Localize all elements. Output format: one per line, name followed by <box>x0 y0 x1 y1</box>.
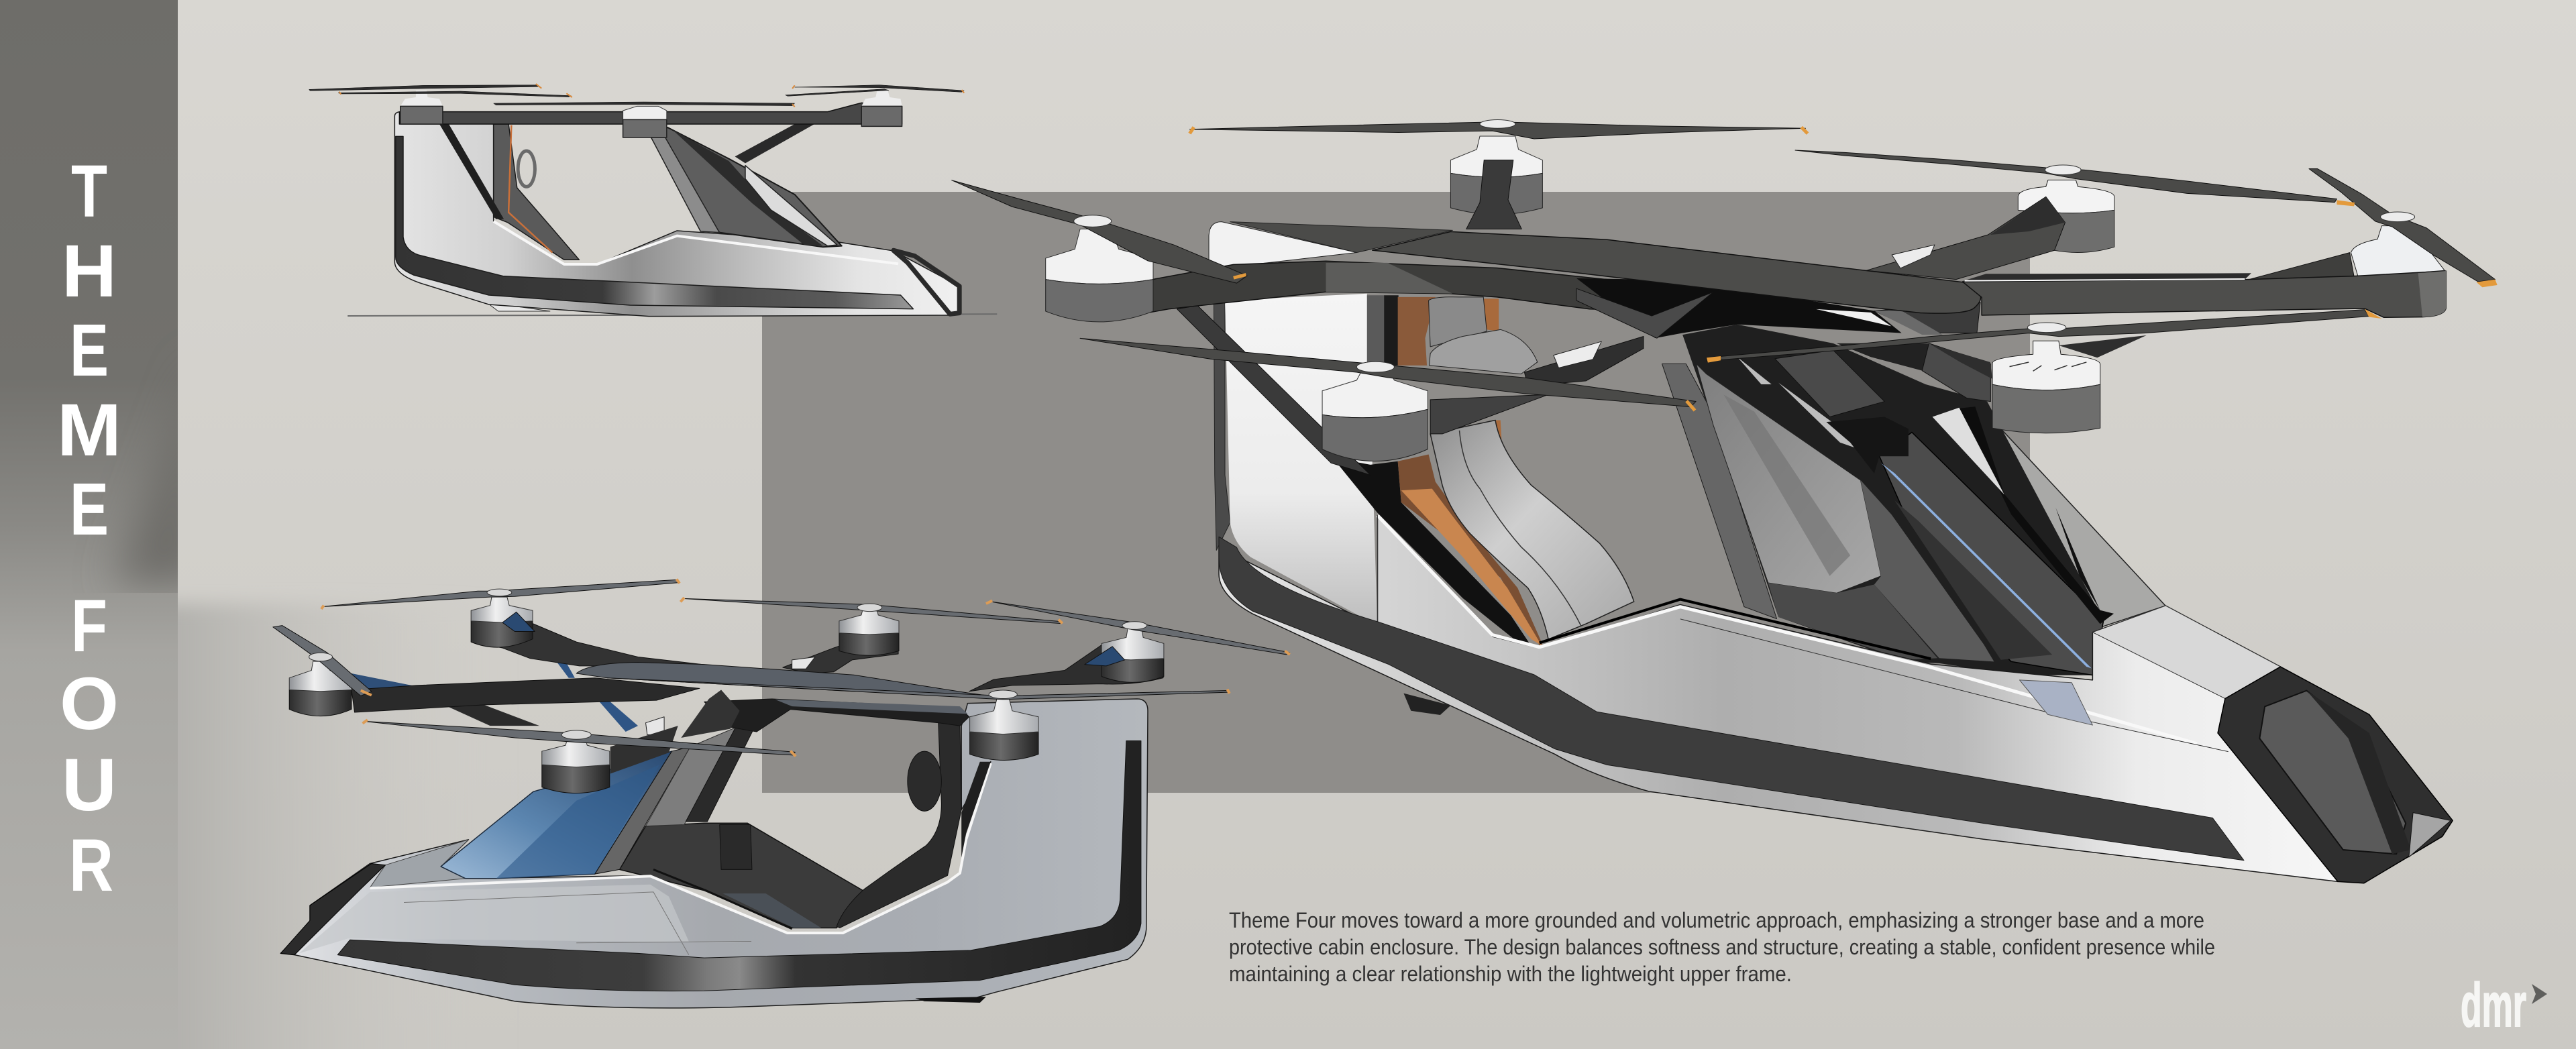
motor front left cap <box>542 739 610 767</box>
seat cushion <box>722 893 821 928</box>
white cabin sill <box>1378 516 2197 744</box>
vertical title: THEME FOUR: U <box>62 744 117 826</box>
windshield pillar <box>651 137 719 233</box>
white shoulder highlight <box>494 221 898 264</box>
frame, strut and left arm <box>1150 222 1644 475</box>
clear screen <box>745 166 837 246</box>
window pillar <box>595 747 690 874</box>
lower glass <box>1768 583 1937 660</box>
windshield dark reflection <box>496 765 659 879</box>
motor top centre <box>1450 136 1542 229</box>
motor rear left cap <box>471 597 533 622</box>
left edge strip <box>1214 266 1230 550</box>
arm strut <box>2249 253 2354 280</box>
middle glass <box>1860 480 1994 661</box>
headrest <box>518 151 535 186</box>
right arm <box>969 645 1163 692</box>
mast <box>1466 160 1521 229</box>
seat lower <box>1430 421 1634 639</box>
dark side band <box>396 136 913 309</box>
front frame <box>681 690 740 738</box>
hubs <box>2045 165 2081 175</box>
left arm <box>1150 261 1644 313</box>
trim right <box>1483 298 1502 451</box>
seat back <box>1429 297 1487 347</box>
orange blade tips <box>1189 127 1808 410</box>
top window frame <box>704 699 969 732</box>
side view vehicle (top left) <box>309 84 997 317</box>
front pillar <box>1662 364 1776 619</box>
orange trim lower <box>1401 489 1542 645</box>
vertical title: THEME FOUR: T <box>71 150 107 233</box>
cap <box>1450 136 1542 177</box>
description paragraph: maintaining a clear relationship with the lightweight upper frame. <box>1229 962 1792 986</box>
roof top <box>1373 231 1981 313</box>
motor rear right cap <box>2018 180 2114 213</box>
strut to front motor <box>1931 335 2147 379</box>
side window <box>1697 364 1881 593</box>
jamb black <box>1384 295 1399 366</box>
left arm <box>352 678 700 712</box>
vertical title: THEME FOUR: R <box>69 824 113 907</box>
motor left cap <box>289 661 352 692</box>
lower left background fade <box>80 604 510 1049</box>
motor left body <box>1046 280 1153 322</box>
bracket <box>646 717 664 735</box>
front motor body <box>1992 384 2100 433</box>
arm end light <box>2418 271 2446 317</box>
rear strut <box>439 124 504 219</box>
dark glass strip <box>672 129 823 246</box>
white glints <box>1737 357 1880 456</box>
motor front left cap <box>1322 372 1428 418</box>
logo chevron <box>2532 984 2547 1004</box>
grey backdrop panel <box>762 192 2030 793</box>
ground line <box>347 314 997 316</box>
arm to front motor <box>1430 394 1548 434</box>
motor rear right body <box>2050 210 2114 253</box>
white triangle <box>1933 408 2004 494</box>
upper white panel <box>1209 222 1356 266</box>
motor rear left body <box>471 621 533 647</box>
brown trim upper <box>1398 297 1436 366</box>
strut to motor <box>1922 343 1990 402</box>
motor rear centre body <box>839 633 899 655</box>
blue windshield <box>441 751 672 879</box>
rear motors and arm <box>1866 180 2445 280</box>
cylinder <box>1450 173 1542 215</box>
roof slab <box>1373 231 1981 313</box>
arm below roof end <box>1837 343 1929 371</box>
nose edge <box>280 863 385 955</box>
screen spike <box>2055 508 2100 610</box>
back arm <box>472 620 715 666</box>
X brace <box>1576 288 1713 338</box>
description paragraph <box>1229 908 2215 986</box>
body shell <box>1219 516 2338 881</box>
interior cabin <box>619 823 863 928</box>
skid <box>915 997 986 1003</box>
vertical title: THEME FOUR: F <box>71 585 107 667</box>
motor centre <box>623 106 667 119</box>
motor front right cap <box>970 699 1038 734</box>
rear arm <box>1866 197 2065 280</box>
upper arm <box>399 103 902 124</box>
white sill line <box>370 763 991 933</box>
back wall and seat <box>1209 222 1634 646</box>
roof slab <box>576 662 989 696</box>
vertical title: THEME FOUR: H <box>62 230 117 313</box>
cap grille <box>2010 362 2086 371</box>
left arm blue fin <box>352 673 416 690</box>
black footwell <box>1333 458 1532 646</box>
vertical title: THEME FOUR <box>57 150 121 907</box>
motor left body <box>289 690 352 716</box>
right blue fin <box>1085 647 1125 666</box>
vertical title: THEME FOUR: O <box>60 663 119 745</box>
right clear screen <box>1980 406 2165 630</box>
hubs <box>309 589 1147 739</box>
motor left <box>400 91 443 106</box>
dark pillar <box>686 711 763 822</box>
vertical title: THEME FOUR: E <box>70 309 109 392</box>
nose screen <box>2259 691 2406 854</box>
blade front right <box>1707 310 2369 361</box>
lower left vehicle (three-quarter front) <box>273 579 1290 1008</box>
rear centre arm <box>783 637 898 673</box>
body highlight plate <box>299 885 751 953</box>
white glint under roof <box>1816 309 1891 326</box>
foot skid <box>1403 694 1450 715</box>
white highlight <box>1965 279 2245 281</box>
blue struts behind <box>556 661 638 732</box>
body shell <box>280 699 1148 1008</box>
blue streak <box>1881 463 2092 669</box>
rotor blades <box>273 579 1289 755</box>
plate outline <box>404 892 751 955</box>
blade rear right <box>1795 150 2337 203</box>
front left arm <box>610 726 678 774</box>
center panel <box>1880 432 2104 675</box>
right arm <box>1962 271 2446 317</box>
black sill outline <box>1540 600 1931 659</box>
rear strut <box>961 762 991 858</box>
brown trim lower <box>1398 455 1544 646</box>
motor rear centre cap <box>839 609 899 634</box>
hood <box>370 840 468 887</box>
motor right body <box>1102 659 1164 682</box>
vertical title: THEME FOUR: M <box>57 389 121 472</box>
center panel lower dark <box>1894 501 2052 660</box>
blade tips <box>339 84 964 107</box>
blue fin <box>502 612 535 632</box>
rear bracket <box>792 657 815 669</box>
hood top plate <box>2092 606 2280 699</box>
dark band <box>337 740 1141 991</box>
motor far right cap <box>2351 226 2445 277</box>
headrest <box>908 751 941 811</box>
nose frame <box>894 250 959 314</box>
motor front left body <box>1322 409 1428 461</box>
headrest <box>1430 329 1538 374</box>
orange trim line <box>508 125 552 253</box>
arm top strip <box>1962 273 2251 281</box>
lower body <box>1219 516 2453 883</box>
window reflections <box>1723 394 1850 576</box>
motor right cap <box>1102 628 1164 660</box>
left motors and blades <box>952 120 1808 461</box>
X brace and under-roof <box>1576 278 1990 402</box>
roof top strip <box>1230 222 1452 253</box>
dark body band <box>1219 537 2244 861</box>
roof end block <box>1874 302 1980 333</box>
upper arm link <box>1524 337 1644 386</box>
rotor hubs <box>1074 120 1515 372</box>
front strut <box>735 124 814 163</box>
vertical title: THEME FOUR: E <box>70 468 109 551</box>
rotor blades <box>309 85 964 106</box>
black under roof <box>1576 278 1902 338</box>
black cowl <box>1826 417 1909 474</box>
light strut <box>1874 311 1943 335</box>
rear diagonal strut <box>1177 306 1371 475</box>
striped pillar <box>646 726 740 826</box>
blade far right <box>2309 169 2495 282</box>
orange tips <box>1707 200 2498 363</box>
dashboard display <box>1775 350 1884 417</box>
nose inner strip <box>2306 691 2411 854</box>
motor front left body <box>542 765 610 793</box>
white bracket <box>1554 341 1601 368</box>
description paragraph: protective cabin enclosure. The design balances softness and structure, creating a stable, confident presence while <box>1229 935 2215 959</box>
right arm, motors, blades <box>1707 150 2498 433</box>
band corner shading <box>109 439 178 593</box>
front motor cap <box>1992 341 2100 390</box>
seat contour line <box>1460 431 1581 626</box>
motor right <box>861 91 902 106</box>
arm lighter section <box>1326 263 1452 294</box>
side body shell <box>394 112 959 317</box>
dark glazing mass <box>1682 325 2104 675</box>
description paragraph: Theme Four moves toward a more grounded and volumetric approach, emphasizing a stronger base and a more <box>1229 908 2204 932</box>
orange tips <box>321 579 1290 757</box>
white bracket <box>1892 245 1935 268</box>
seat back <box>720 824 752 869</box>
back wall panel <box>1225 294 1377 626</box>
cabin hairline <box>1378 516 2229 752</box>
rotor blades <box>952 122 1805 406</box>
motor left <box>1046 229 1153 284</box>
door ring frame <box>837 723 961 928</box>
nose chin <box>2409 813 2451 857</box>
upper frame light <box>775 700 967 714</box>
door pillar and seat edge <box>494 124 579 260</box>
skid <box>489 304 550 311</box>
black screen streak <box>1960 406 2114 624</box>
main three-quarter vehicle (right) <box>952 120 2498 883</box>
rear arm fin <box>1990 197 2065 235</box>
black inner sill <box>653 869 792 929</box>
left title band <box>0 0 178 1049</box>
dark strut <box>444 705 539 726</box>
windshield <box>651 127 842 247</box>
logo: dmr with chevron <box>2461 971 2547 1040</box>
nose frame <box>2218 667 2453 883</box>
windshield group <box>1662 325 2165 675</box>
logo text: dmr <box>2461 971 2526 1040</box>
blue hood detail <box>2019 680 2092 725</box>
door jamb <box>1367 295 1385 362</box>
motor front right body <box>970 732 1038 760</box>
